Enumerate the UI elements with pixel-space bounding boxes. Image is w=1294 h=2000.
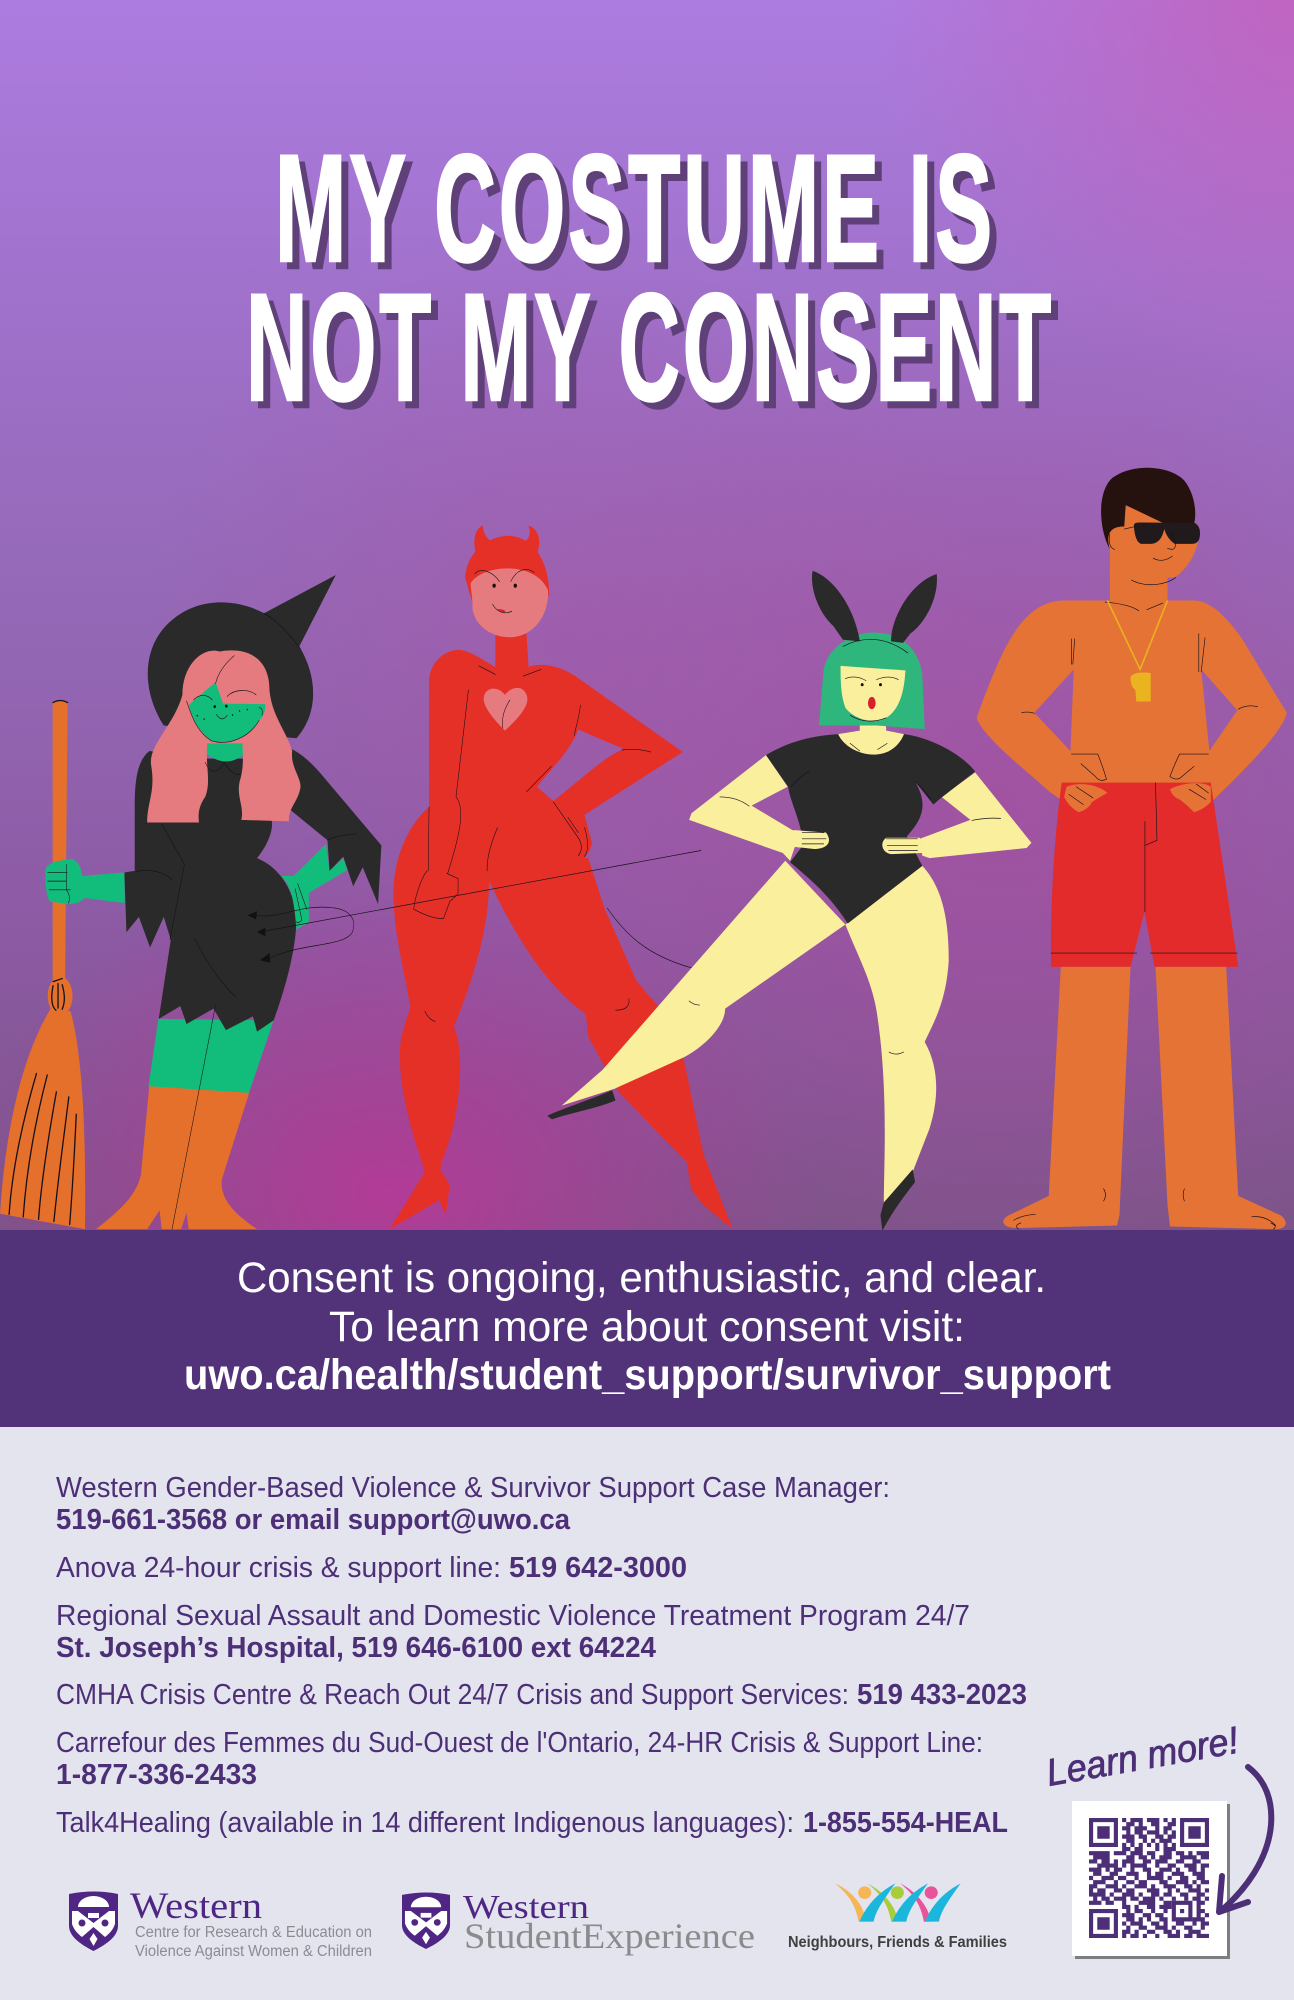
illustration: trident [247, 851, 701, 963]
panel: support contacts [0, 1427, 1294, 2000]
logo: Western Student Experience: StudentExperience [464, 1916, 755, 1956]
contact: St. Joseph's: Regional Sexual Assault and Domestic Violence Treatment Program 24/7 [56, 1600, 970, 1632]
logo: Western Centre for Research and Education [69, 1886, 372, 1960]
illustration: lifeguard [977, 468, 1287, 1229]
contact: Carrefour des Femmes: 1-877-336-2433 [56, 1759, 257, 1791]
contact: CMHA: 519 433-2023 [857, 1679, 1027, 1711]
contact: Anova: Anova 24-hour crisis & support line: [56, 1552, 501, 1584]
illustration: bunny [547, 571, 1031, 1231]
QR code [1072, 1801, 1230, 1959]
contact: CMHA: CMHA Crisis Centre & Reach Out 24/7 Crisis and Support Services: [56, 1679, 849, 1711]
logo: Western Centre for Research and Education: Centre for Research & Education on [135, 1924, 372, 1941]
url: uwo.ca/health/student_support/survivor_support [184, 1351, 1111, 1399]
consent statement: Consent is ongoing, enthusiastic, and clear. [237, 1254, 1046, 1302]
contact: Talk4Healing: 1-855-554-HEAL [803, 1807, 1008, 1839]
contact: Carrefour des Femmes: Carrefour des Femmes du Sud-Ouest de l'Ontario, 24-HR Crisis & Support Line: [56, 1727, 983, 1759]
contact: Carrefour des Femmes [56, 1727, 983, 1791]
contact: St. Joseph's [56, 1600, 970, 1664]
arrow to QR code [1219, 1767, 1271, 1912]
contact: Western case manager: 519-661-3568 or email support@uwo.ca [56, 1504, 571, 1536]
title [246, 123, 1061, 440]
panel: purple gradient background [0, 0, 1294, 1232]
contact: Western case manager: Western Gender-Based Violence & Survivor Support Case Manager: [56, 1472, 890, 1504]
panel: consent banner [0, 1230, 1294, 1427]
illustration: devil with trident [390, 526, 732, 1229]
contact: Western case manager [56, 1472, 890, 1536]
logo: Western Student Experience [402, 1889, 755, 1956]
learn more line: To learn more about consent visit: [329, 1303, 965, 1351]
logo: Western Centre for Research and Education: Violence Against Women & Children [135, 1943, 372, 1960]
contact: Talk4Healing: Talk4Healing (available in 14 different Indigenous languages): [56, 1807, 794, 1839]
learn more handwritten callout: Learn more! [1043, 1720, 1242, 1795]
contact: Anova: 519 642-3000 [509, 1552, 687, 1584]
logo: Western Centre for Research and Education: Western [130, 1886, 262, 1927]
logo: Neighbours, Friends and Families: Neighbours, Friends & Families [788, 1934, 1007, 1951]
logo: Neighbours, Friends and Families [788, 1883, 1007, 1951]
illustration: witch with broom [0, 575, 381, 1229]
logo: Western Student Experience: Western [463, 1889, 589, 1926]
contact: St. Joseph's: St. Joseph’s Hospital, 519 646-6100 ext 64224 [56, 1632, 656, 1664]
